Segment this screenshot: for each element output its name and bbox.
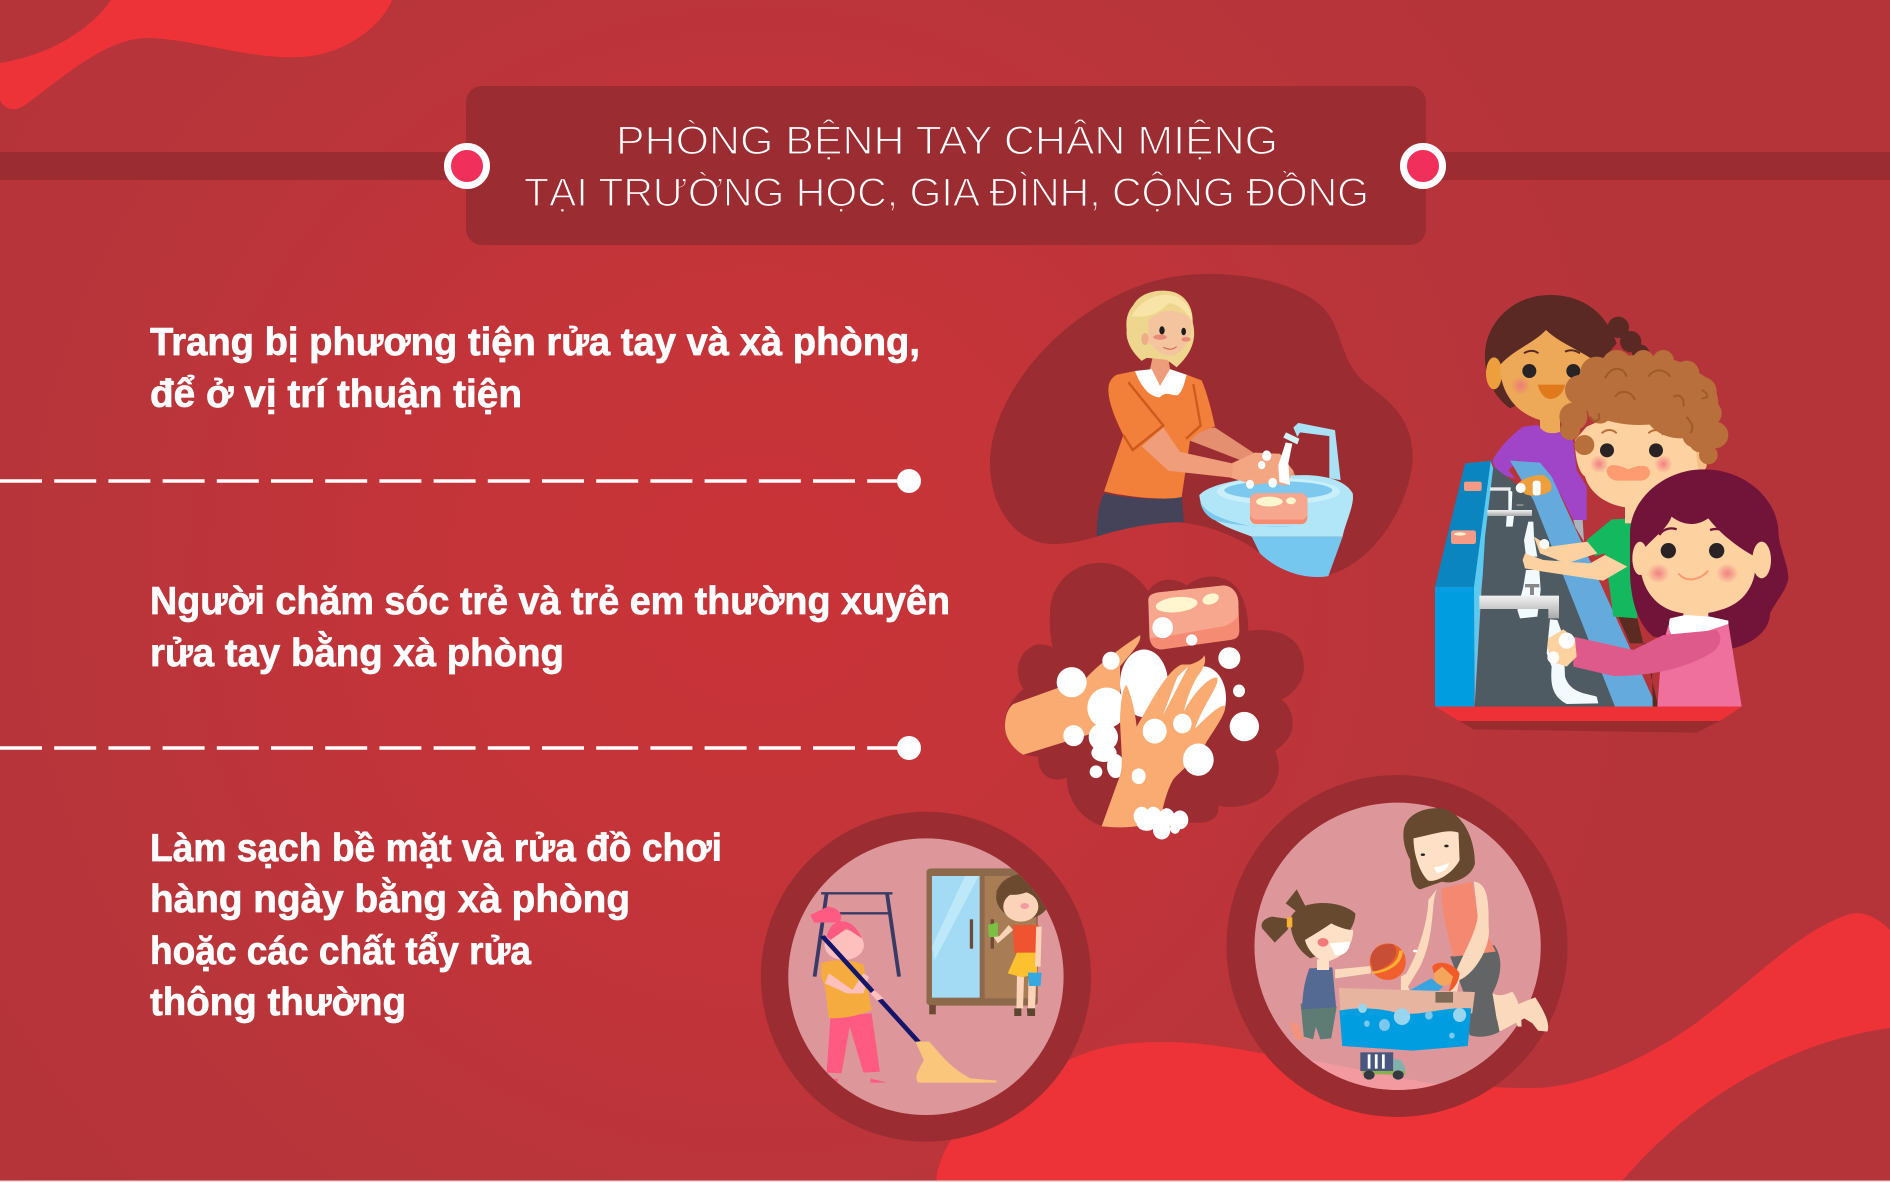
blob: top left red xyxy=(0,0,392,109)
drying rack xyxy=(815,893,899,977)
pants xyxy=(1097,493,1184,537)
title panel xyxy=(466,86,1426,245)
text: item 2: rửa tay bằng xà phòng xyxy=(150,631,564,675)
hands at tap xyxy=(1232,453,1293,486)
illustration: circle, mother and child washing toys xyxy=(1226,775,1568,1117)
text: item 2 xyxy=(150,580,950,675)
illustration: three children at wash station xyxy=(1435,295,1788,733)
foam behind hands xyxy=(1120,649,1226,730)
illustration: soapy hands and soap bar xyxy=(1005,563,1304,839)
wash tub xyxy=(1339,988,1475,1051)
ball xyxy=(1370,943,1406,980)
girl with long dark hair xyxy=(1547,469,1788,707)
soap bubbles xyxy=(1057,617,1259,839)
girl hands with foam xyxy=(1516,475,1552,496)
bottom edge strip xyxy=(0,1180,1890,1182)
foam on wrist xyxy=(1087,687,1126,778)
neck xyxy=(1150,354,1180,390)
text: item 3: thông thường xyxy=(150,981,406,1024)
circle fill xyxy=(1254,803,1541,1090)
text: item 1: để ở vị trí thuận tiện xyxy=(150,373,522,416)
face xyxy=(1148,311,1191,356)
boy in green shirt xyxy=(1523,350,1728,707)
toy truck xyxy=(1360,1052,1405,1080)
floor highlight xyxy=(1310,1060,1438,1090)
illustration: circle, girls mopping and wiping wardrobe xyxy=(761,812,1091,1142)
title ring left xyxy=(448,146,486,186)
dark cloud backdrop xyxy=(1005,563,1304,826)
title band xyxy=(0,152,1890,180)
soap bar xyxy=(1148,585,1239,649)
circle fill xyxy=(788,838,1064,1115)
left hand xyxy=(1005,635,1140,755)
text: item 3 xyxy=(150,827,722,1024)
divider 2 with end dot xyxy=(0,736,921,760)
text: item 3: hàng ngày bằng xà phòng xyxy=(150,877,630,921)
child xyxy=(1262,889,1371,1039)
collar xyxy=(1135,369,1187,397)
title ring right xyxy=(1404,146,1442,186)
text: item 1: Trang bị phương tiện rửa tay và xà phòng, xyxy=(150,321,920,364)
wardrobe xyxy=(926,868,1038,1014)
bubble xyxy=(1413,950,1417,952)
text: item 3: Làm sạch bề mặt và rửa đồ chơi xyxy=(150,827,722,870)
base shadow xyxy=(1459,721,1720,733)
curly hair xyxy=(1559,350,1728,464)
soap xyxy=(1250,493,1307,524)
circle ring xyxy=(1226,775,1568,1117)
text: item 3: hoặc các chất tẩy rửa xyxy=(150,930,531,973)
front arm xyxy=(1142,427,1275,485)
illustration: woman washing hands at sink xyxy=(990,274,1413,577)
hair back xyxy=(1126,291,1194,367)
base shelf xyxy=(1435,707,1742,721)
wash station xyxy=(1435,461,1657,707)
right hand xyxy=(1102,655,1225,827)
back arm xyxy=(1190,427,1295,486)
tap xyxy=(1293,423,1341,480)
girl with brown hair xyxy=(1485,295,1649,542)
girl wiping xyxy=(988,874,1051,1016)
title text line 2: TẠI TRƯỜNG HỌC, GIA ĐÌNH, CỘNG ĐỒNG xyxy=(524,169,1369,215)
doll xyxy=(1410,963,1460,1008)
text: item 2: Người chăm sóc trẻ và trẻ em thường xuyên xyxy=(150,580,950,623)
water and foam xyxy=(1278,442,1292,485)
divider 1 with end dot xyxy=(0,469,921,493)
shirt xyxy=(1104,371,1215,499)
blob: bottom red wave xyxy=(936,913,1890,1182)
circle ring xyxy=(761,812,1091,1142)
title text line 1: PHÒNG BỆNH TAY CHÂN MIỆNG xyxy=(616,118,1278,163)
girl mopping xyxy=(810,907,997,1083)
text: item 1 xyxy=(150,321,920,416)
mother xyxy=(1401,808,1548,1037)
dark blob backdrop xyxy=(990,274,1413,576)
sink basin xyxy=(1252,537,1343,577)
